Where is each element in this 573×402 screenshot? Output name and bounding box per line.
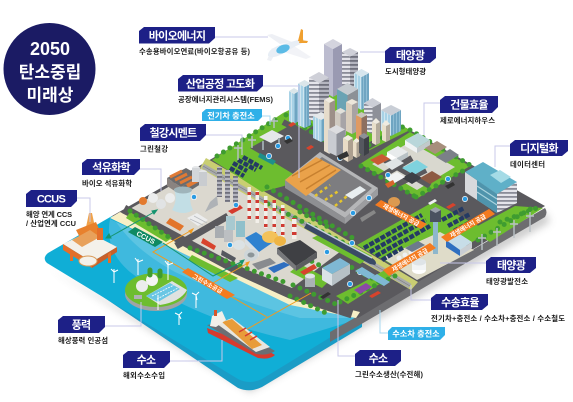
zero energy houses <box>370 133 459 184</box>
green hydrogen plant <box>305 258 390 299</box>
tree rows <box>130 115 542 315</box>
label: CCUS <box>26 190 90 228</box>
label: 태양광 (태양광발전소) <box>440 257 536 286</box>
label: CCUS: / 산업연계 CCU <box>26 219 76 228</box>
label: 석유화학: 석유화학 <box>92 160 130 174</box>
label: 철강시멘트 <box>140 124 242 155</box>
label: 태양광 (태양광발전소): 태양광 <box>497 258 526 272</box>
solar panels by the charging station <box>230 157 262 176</box>
petrochemical plant <box>139 166 243 231</box>
label: 태양광 (태양광발전소): 태양광발전소 <box>486 277 528 286</box>
label: 디지털화: 데이터센터 <box>510 160 545 169</box>
label: 디지털화: 디지털화 <box>520 141 558 155</box>
land base: road network <box>112 88 545 318</box>
banner: CCUS <box>128 227 163 247</box>
energy tower and solar plant <box>396 207 472 274</box>
label: 수송효율: 전기차+충전소 / 수소차+충전소 / 수소철도 <box>431 314 565 323</box>
banner: 재생에너지 공급 2: 재생에너지 공급 <box>449 212 488 240</box>
green belts <box>126 88 543 304</box>
artificial island <box>125 270 187 311</box>
label: 수소차 충전소: 수소차 충전소 <box>392 328 440 338</box>
label: 전기차 충전소: 전기차 충전소 <box>207 110 255 120</box>
factory with orange roof <box>285 152 378 224</box>
cross road <box>176 216 228 246</box>
title badge: 2050 <box>30 39 70 59</box>
label: 수소 (그린수소생산): 그린수소생산(수전해) <box>355 370 424 379</box>
label: 산업공정 고도화 <box>178 75 299 178</box>
other vehicles <box>284 122 456 222</box>
platform shadow <box>50 212 550 392</box>
label: 산업공정 고도화: 공장에너지관리시스템(FEMS) <box>178 95 274 104</box>
label: 바이오에너지: 수송용바이오연료(바이오항공유 등) <box>139 47 251 56</box>
label: 태양광 (도시형태양광) <box>360 47 436 76</box>
label: 철강시멘트: 그린철강 <box>140 144 168 154</box>
title badge <box>4 23 96 115</box>
banner: 재생에너지 공급 1: 재생에너지 공급 <box>381 202 421 228</box>
label: 풍력: 풍력 <box>72 318 90 332</box>
label: 디지털화 <box>495 140 568 169</box>
label: 수소 (그린수소생산): 수소 <box>369 352 388 365</box>
label: 수소 (해외수소수입): 해외수소수입 <box>123 371 165 380</box>
label: 수소 (해외수소수입) <box>123 340 222 380</box>
beach <box>110 212 360 318</box>
pylons <box>234 118 534 250</box>
label: 수소 (해외수소수입): 수소 <box>137 354 156 366</box>
gray process towers <box>217 167 238 206</box>
label: 건물효율: 제로에너지하우스 <box>440 116 495 125</box>
label: 수송효율 <box>411 285 565 323</box>
banner: 그린수소공급 <box>182 268 235 299</box>
solar farm <box>364 208 476 260</box>
label: CCUS: CCUS <box>37 194 66 206</box>
label: 태양광 (도시형태양광): 도시형태양광 <box>385 67 426 76</box>
banner: 재생에너지 공급 3 <box>383 243 436 276</box>
label: 석유화학: 바이오 석유화학 <box>82 179 132 188</box>
label: 건물효율: 건물효율 <box>450 98 488 112</box>
title badge: 탄소중립 <box>19 63 81 82</box>
rail and olive band <box>200 158 418 290</box>
banner: 그린수소공급: 그린수소공급 <box>191 272 224 296</box>
data center <box>465 162 517 213</box>
banner: CCUS: CCUS <box>135 231 156 246</box>
banner: 재생에너지 공급 1 <box>375 200 427 229</box>
title badge: 미래상 <box>27 86 74 105</box>
tanks and warehouse <box>201 216 317 275</box>
label: 수소 (그린수소생산) <box>338 300 424 379</box>
label: 바이오에너지: 바이오에너지 <box>149 30 205 42</box>
hydrogen and charging markers <box>191 135 468 287</box>
oil rig <box>63 213 117 268</box>
label: 수소차 충전소 <box>380 310 445 340</box>
wind turbines <box>111 258 199 325</box>
label: 철강시멘트: 철강시멘트 <box>149 126 197 140</box>
label: 산업공정 고도화: 산업공정 고도화 <box>186 76 255 90</box>
label: 전기차 충전소 <box>202 109 270 125</box>
city roads <box>283 118 430 188</box>
train <box>304 223 376 265</box>
label: 석유화학 <box>82 159 161 191</box>
label: 풍력 <box>58 302 141 345</box>
banner: 재생에너지 공급 2 <box>441 209 495 242</box>
coast road <box>124 209 352 314</box>
platform: land side wall <box>330 208 546 342</box>
label: 풍력: 해상풍력 인공섬 <box>58 336 108 345</box>
red and white stacks <box>248 187 296 239</box>
airplane <box>267 29 311 61</box>
platform: sea <box>45 216 362 390</box>
petrochemical ground <box>128 166 345 288</box>
city skyscrapers <box>289 39 401 162</box>
label: CCUS: 해양 연계 CCS <box>26 210 72 219</box>
charging station <box>258 130 292 165</box>
banner: 재생에너지 공급 3: 재생에너지 공급 <box>391 246 430 274</box>
label: 태양광 (도시형태양광): 태양광 <box>396 48 425 62</box>
label: 바이오에너지 <box>139 27 268 56</box>
label: 건물효율 <box>424 96 498 135</box>
pipeline arrows <box>106 210 311 332</box>
label: 수송효율: 수송효율 <box>441 296 479 309</box>
tanker ship <box>207 310 275 359</box>
